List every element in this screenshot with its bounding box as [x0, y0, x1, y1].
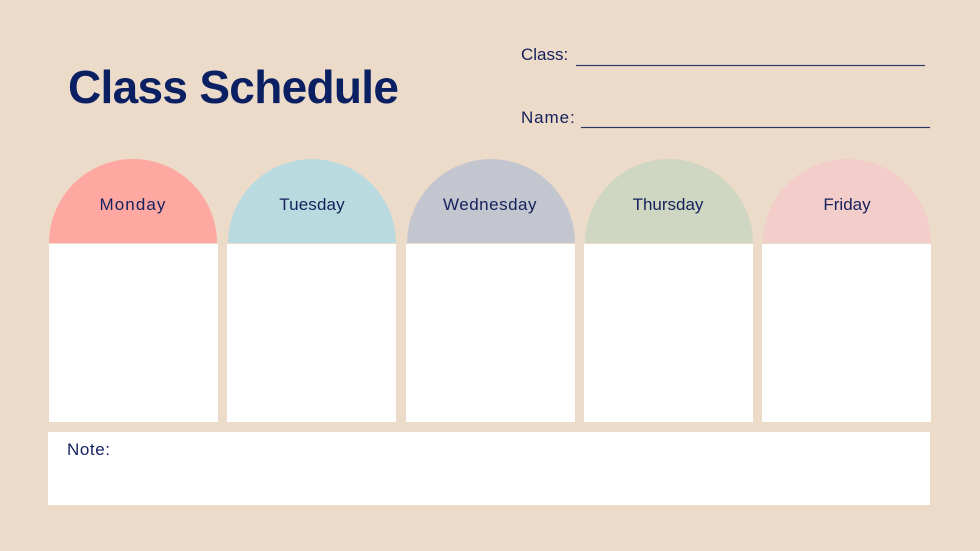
panel: Wednesday header — [407, 159, 575, 243]
panel: Wednesday header: Wednesday — [443, 195, 537, 214]
panel: Thursday header: Thursday — [633, 195, 703, 214]
panel: note — [48, 432, 930, 505]
panel: Thursday header — [585, 159, 753, 243]
name line — [581, 127, 930, 128]
note label: Note: — [67, 440, 111, 459]
panel: Wednesday body — [406, 244, 575, 422]
class line — [576, 65, 925, 66]
title: Class Schedule — [68, 61, 398, 113]
panel: Tuesday header: Tuesday — [279, 195, 345, 214]
class label: Class: — [521, 45, 568, 64]
panel: Tuesday body — [227, 244, 396, 422]
panel: Monday header: Monday — [99, 195, 167, 214]
panel: Friday header — [763, 159, 931, 243]
panel: Monday body — [49, 244, 218, 422]
panel: Monday header — [49, 159, 217, 243]
panel: Thursday body — [584, 244, 753, 422]
name label: Name: — [521, 108, 576, 127]
panel: Friday body — [762, 244, 931, 422]
panel: Friday header: Friday — [823, 195, 871, 214]
panel: Tuesday header — [228, 159, 396, 243]
